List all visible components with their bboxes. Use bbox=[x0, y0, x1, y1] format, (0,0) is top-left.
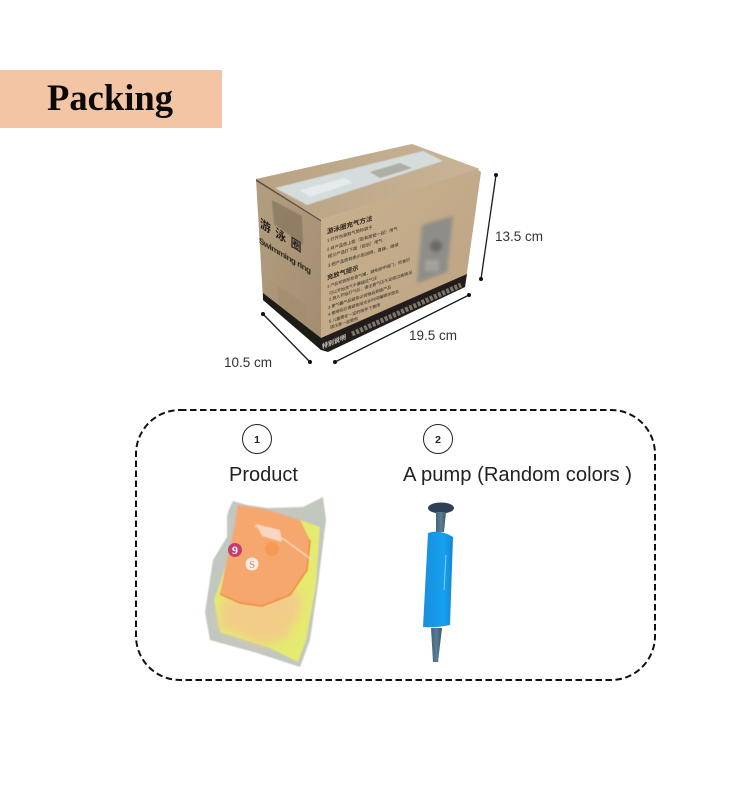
item 2 label: A pump (Random colors ) bbox=[403, 464, 632, 486]
bag highlights bbox=[255, 526, 312, 560]
orange ring section bbox=[220, 505, 310, 606]
printed instructions: 1.打开包装取气筒和袋子 bbox=[327, 223, 373, 244]
item 2 number badge bbox=[424, 424, 452, 454]
item 1 label: Product bbox=[229, 464, 298, 486]
carton box photo bbox=[256, 144, 481, 352]
dimension: height 13.5 cm: 13.5 cm bbox=[495, 229, 543, 244]
printed instructions: 2.放入开始打气后，请注意气压不足或过高情况 bbox=[329, 269, 412, 302]
panel: package contents bbox=[136, 410, 655, 680]
dimension: height 13.5 cm bbox=[479, 173, 543, 281]
printed instructions: 5.儿童需在一定的陪伴下使用 bbox=[329, 301, 380, 324]
printed instructions: 2.将产品放上面（若有按钮一起）用气 bbox=[327, 225, 398, 253]
yellow ring section bbox=[214, 520, 320, 662]
printed instructions: 3.使气囊产品避免尖锐物品划破产品 bbox=[328, 283, 391, 310]
printed instructions: 充放气提示 bbox=[327, 263, 359, 282]
heading: Packing: Packing bbox=[47, 78, 173, 119]
pump handle bbox=[428, 502, 454, 514]
pump bbox=[423, 502, 454, 662]
printed instructions: 提示产品打下面（前后）用气 bbox=[328, 237, 383, 260]
printed instructions: 3.把产品放到表示到说明，直接，继续 bbox=[328, 241, 399, 269]
bag logo badges bbox=[228, 543, 242, 557]
printed instructions: 1.产品充放前检查气嘴，避免损坏阀门，检查后 bbox=[327, 256, 410, 289]
box left face bbox=[256, 179, 321, 350]
printed instructions: 游泳圈充气方法 bbox=[327, 213, 373, 236]
box front face bbox=[321, 169, 481, 352]
product: swim ring in plastic bag bbox=[205, 497, 326, 667]
dimension: length 19.5 cm: 19.5 cm bbox=[409, 328, 457, 343]
plastic bag bbox=[205, 497, 326, 667]
item 1 number badge: 1 bbox=[254, 434, 260, 446]
box left face: 游泳圈 bbox=[260, 215, 301, 255]
dimension: width 10.5 cm: 10.5 cm bbox=[224, 355, 272, 370]
pump barrel bbox=[423, 532, 453, 627]
pump nozzle bbox=[431, 628, 442, 662]
printed instructions: 请注意一定使用 bbox=[330, 315, 358, 330]
item 1 number badge bbox=[242, 424, 272, 454]
item 2 number badge: 2 bbox=[435, 434, 441, 446]
peach fold bbox=[218, 590, 302, 645]
box left face: Swimming ring bbox=[259, 236, 311, 276]
dimension: width 10.5 cm bbox=[224, 312, 312, 370]
blurred QR label bbox=[417, 216, 453, 283]
heading: Packing bbox=[0, 70, 222, 128]
printed instructions: 4.使用前后请避免阳光长时间曝晒存放处 bbox=[328, 288, 399, 317]
printed instructions bbox=[327, 213, 412, 330]
printed instructions: 可以开始充气不要超过气压 bbox=[329, 274, 377, 296]
product: swim ring in plastic bag: S bbox=[249, 559, 255, 571]
box top face with tape bbox=[256, 144, 480, 222]
dimension: length 19.5 cm bbox=[333, 293, 471, 364]
product: swim ring in plastic bag: 9 bbox=[232, 543, 238, 557]
black band text: 特别说明 bbox=[322, 332, 346, 351]
